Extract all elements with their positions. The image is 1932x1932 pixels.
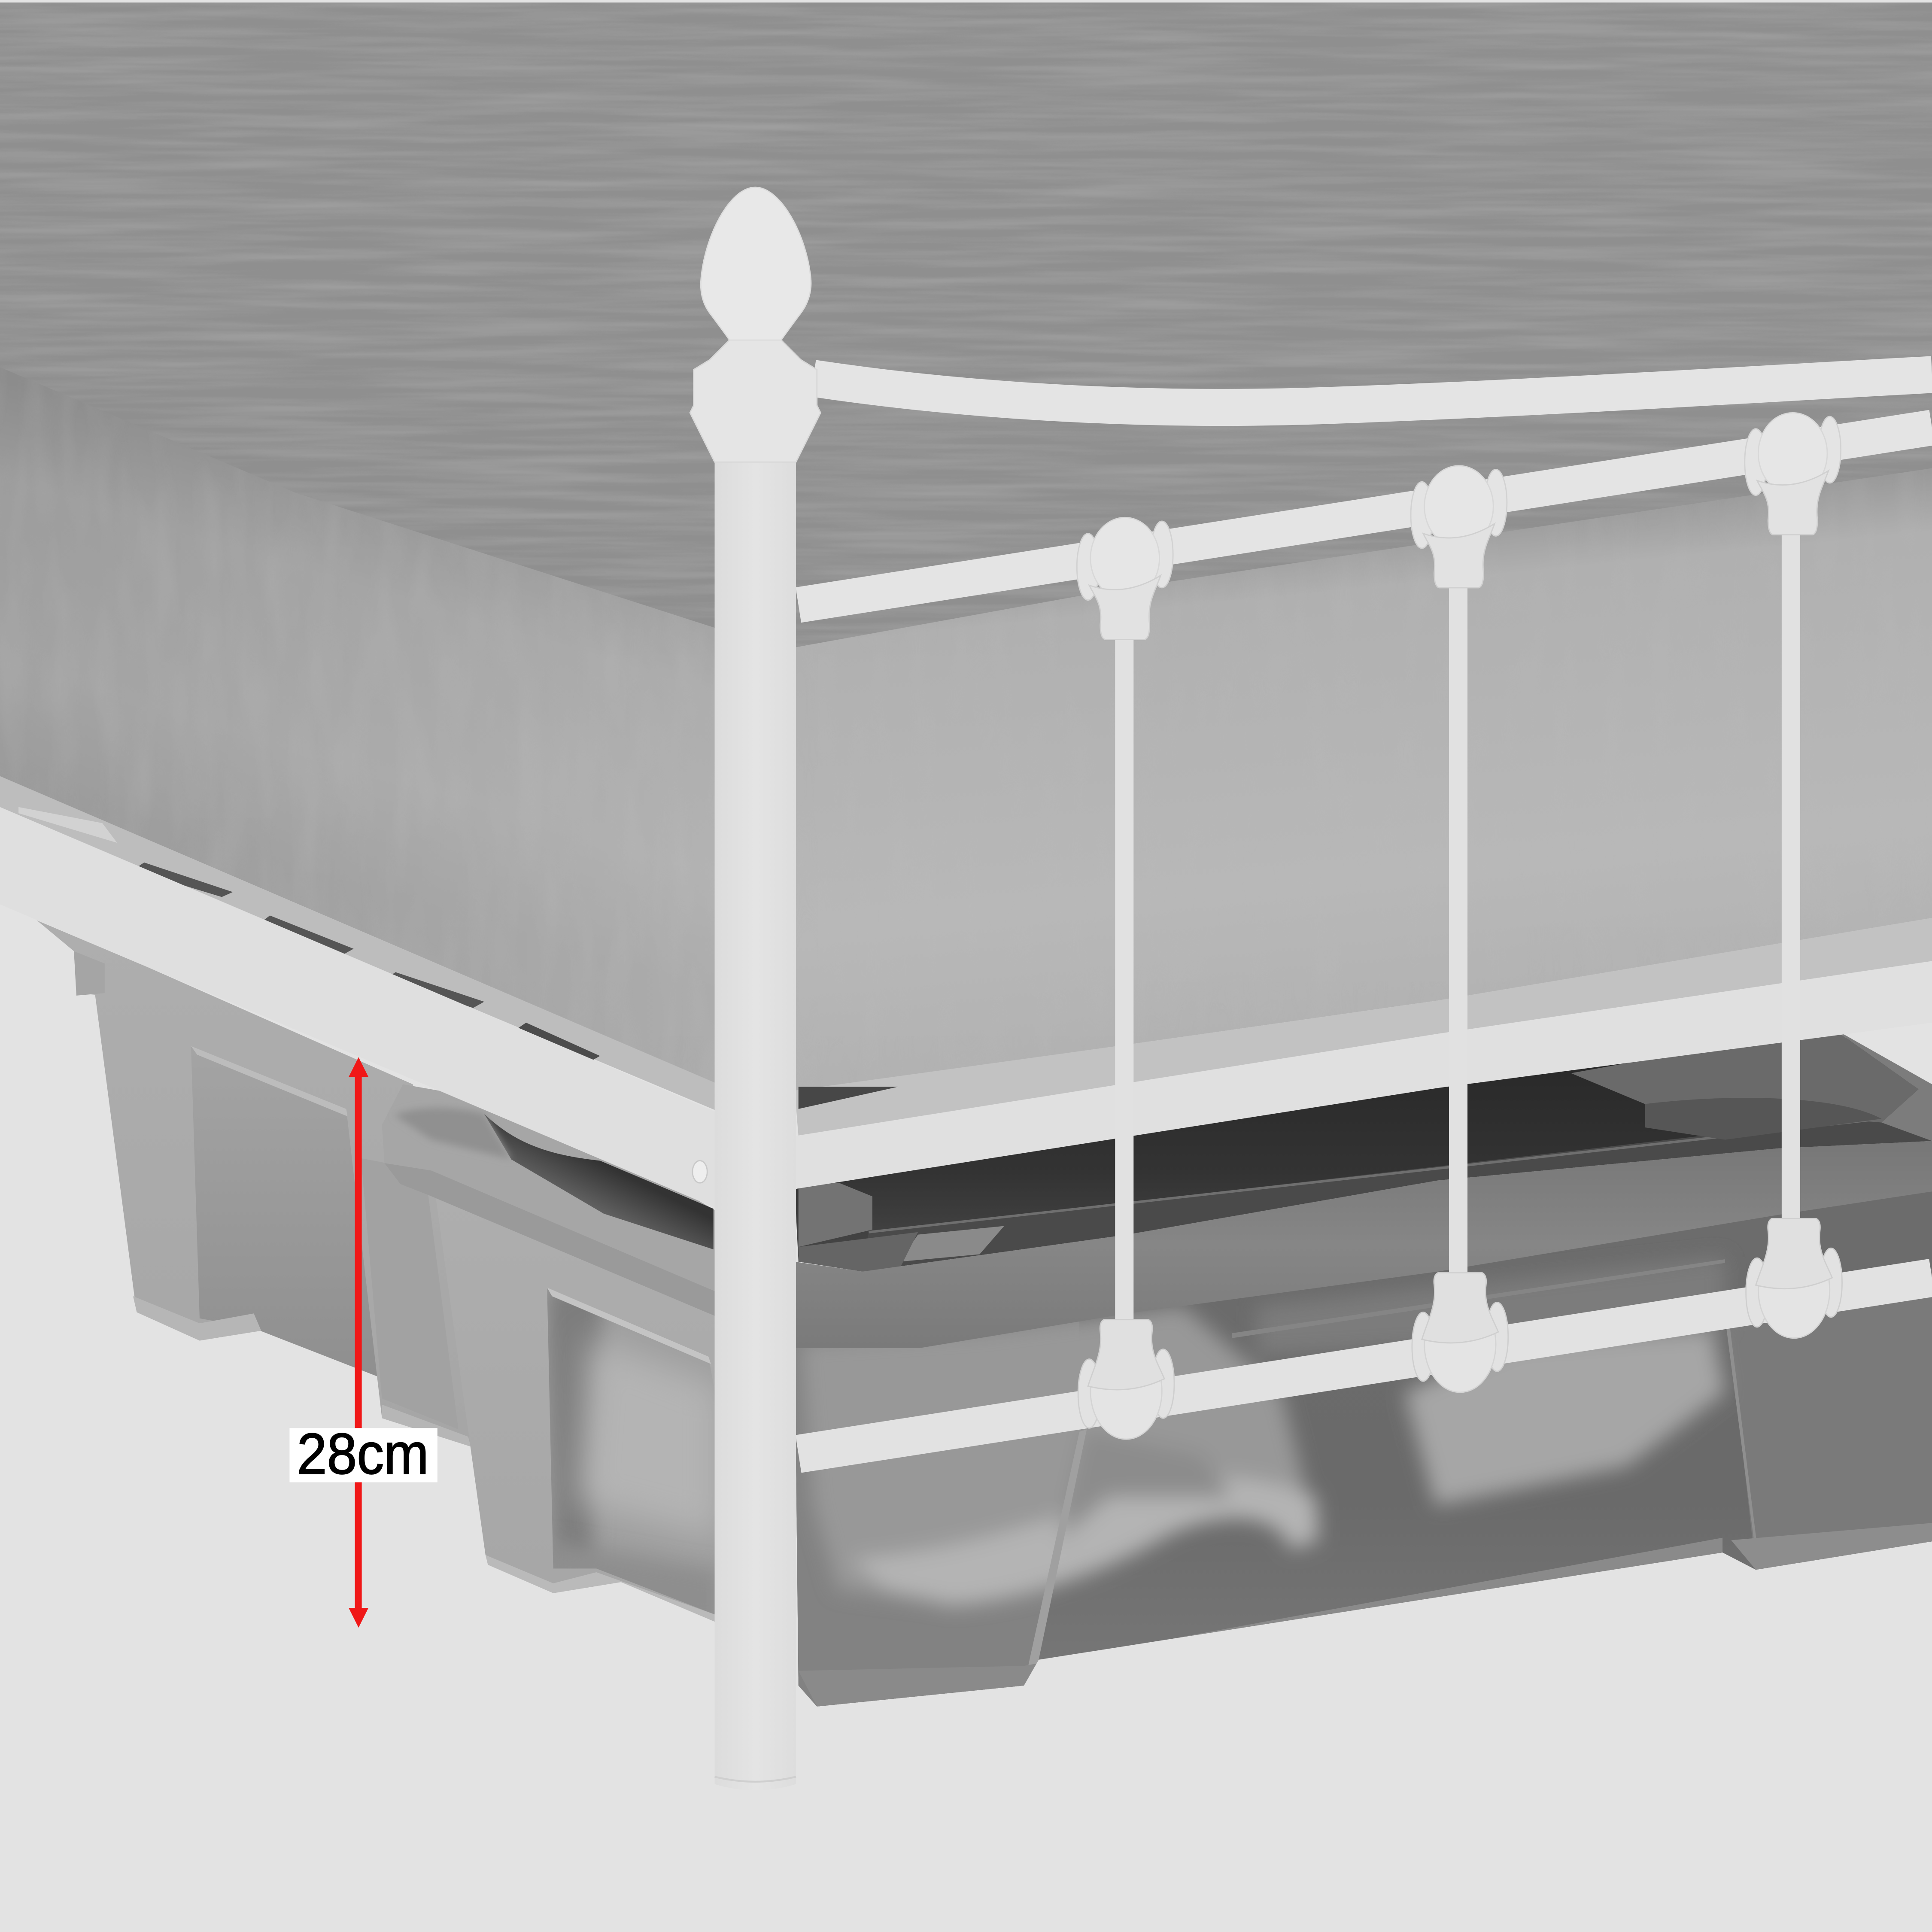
headboard: balusters [1115,524,1800,1337]
storage box: lid band [795,1141,1932,1348]
headboard: lower knuckles [1078,1218,1842,1439]
headboard: upper rail [799,428,1932,605]
mattress: right side [764,456,1932,1109]
mattress: left side [0,345,813,1109]
headboard: upper knuckles [1077,413,1841,639]
bed frame: foot rail [795,918,1932,1189]
headboard: curved top rail [813,374,1932,407]
bed frame: left side rail [0,807,715,1207]
storage box: left wall of front box [434,1183,721,1626]
storage box: lid left corner [382,1084,721,1318]
storage box: rear left [37,920,471,1446]
bed frame: slats [0,776,727,1115]
post head [690,340,820,462]
dimension label: 28cm [297,1421,429,1486]
bed post [690,187,820,1790]
blurred stored laundry [801,1257,1725,1605]
finial [701,187,811,340]
storage box: interior seen through frame [795,1025,1932,1272]
storage box: translucent front face with laundry [789,1183,1932,1713]
dimension arrow: 28cm height [349,1057,368,1628]
headboard: lower rail [799,1278,1932,1454]
mattress: top surface [0,0,1932,665]
